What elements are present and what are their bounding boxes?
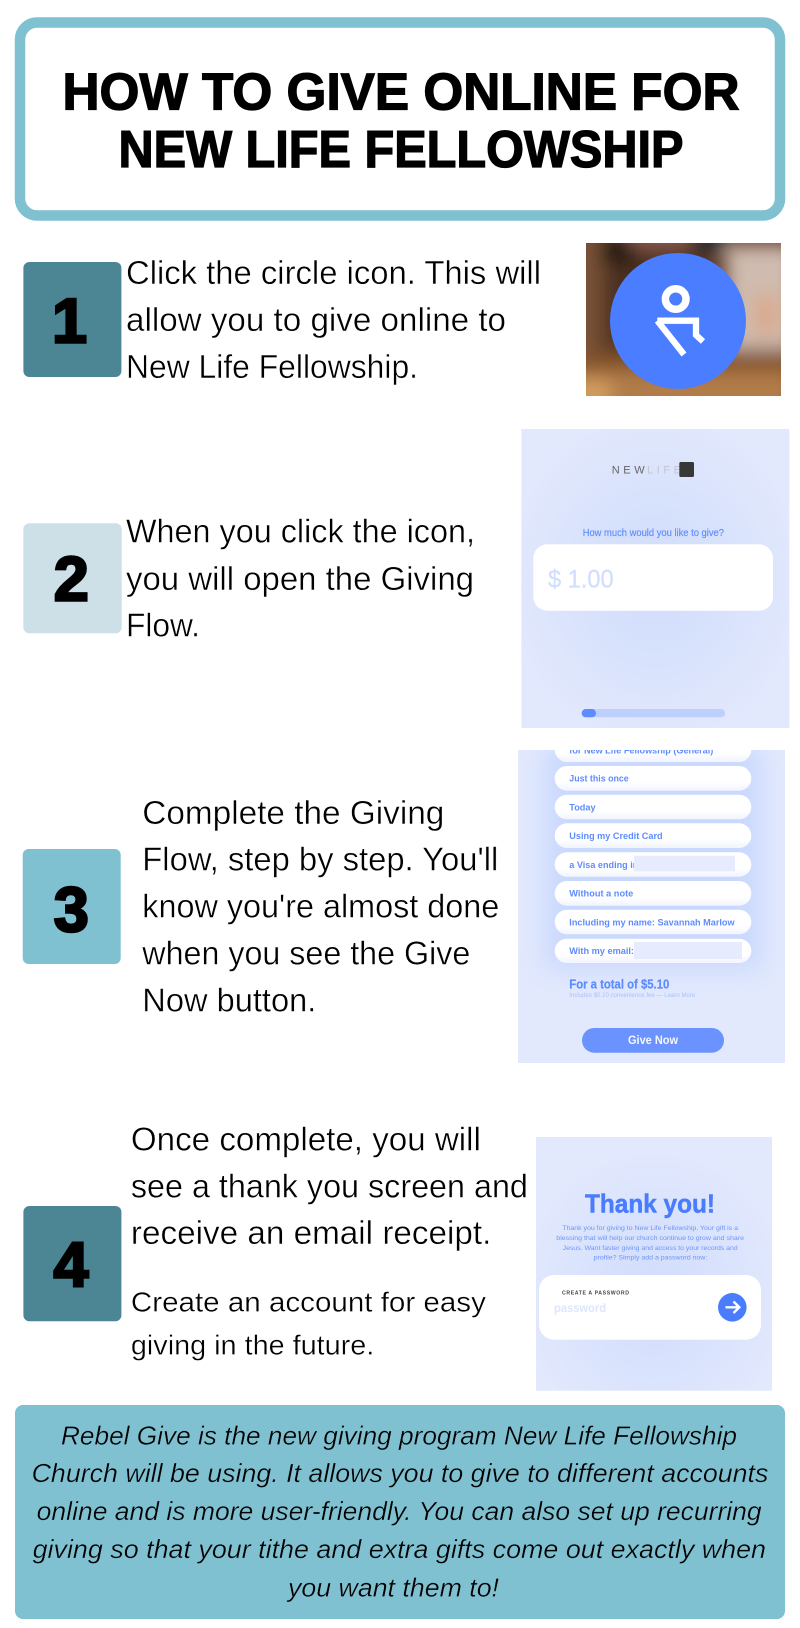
step 1 instructions: New Life Fellowship. <box>126 348 418 385</box>
option pills: Using my Credit Card <box>569 831 663 841</box>
step 4 number badge <box>23 1206 121 1321</box>
step 3 instructions <box>141 794 499 1018</box>
amount prompt: How much would you like to give? <box>583 528 724 539</box>
step 2 instructions <box>126 513 475 644</box>
footer text: you want them to! <box>286 1573 499 1603</box>
step 3 instructions: Now button. <box>142 981 316 1018</box>
new life logo: LIFE <box>647 464 681 476</box>
footer text <box>32 1420 768 1603</box>
option pills: With my email: <box>569 946 634 956</box>
thank you message: profile? Simply add a password now: <box>594 1254 707 1262</box>
password card: CREATE A PASSWORD <box>562 1291 629 1297</box>
footer text: online and is more user-friendly. You can also set up recurring <box>37 1496 762 1526</box>
thank you heading: Thank you! <box>585 1189 715 1219</box>
total amount <box>569 977 696 999</box>
step 4 image: thank you screen <box>536 1137 772 1391</box>
title text <box>62 64 740 179</box>
step 1 instructions: allow you to give online to <box>126 301 506 338</box>
footer text: giving so that your tithe and extra gifts come out exactly when <box>33 1534 766 1564</box>
amount field: $ 1.00 <box>548 566 614 594</box>
step 2 number badge <box>23 523 122 633</box>
step 4 <box>23 1121 772 1391</box>
step 3 instructions: when you see the Give <box>141 935 470 972</box>
title box <box>20 22 780 216</box>
title text: HOW TO GIVE ONLINE FOR <box>62 64 740 122</box>
step 4 instructions: giving in the future. <box>131 1329 374 1360</box>
option pills: Just this once <box>569 774 629 784</box>
step 2 instructions: Flow. <box>126 607 200 644</box>
option pills: Including my name: Savannah Marlow <box>569 917 736 927</box>
step 1 image: blue circle icon on blurred photo <box>586 243 781 396</box>
thank you message: Thank you for giving to New Life Fellowship. Your gift is a <box>562 1225 738 1232</box>
total amount: For a total of $5.10 <box>569 977 669 992</box>
step 4 instructions: see a thank you screen and <box>131 1167 528 1204</box>
step 4 instructions: Create an account for easy <box>131 1286 486 1317</box>
password card <box>539 1275 761 1340</box>
step 1 instructions <box>126 254 541 385</box>
total amount: Includes $0.10 convenience fee — Learn More <box>569 992 696 999</box>
step 4 number badge: 4 <box>53 1231 89 1301</box>
step 2 instructions: When you click the icon, <box>126 513 475 550</box>
step 3 instructions: Flow, step by step. You'll <box>142 841 498 878</box>
step 3 instructions: know you're almost done <box>142 887 499 924</box>
progress bar <box>582 709 725 717</box>
footer panel: about rebel give <box>15 1405 785 1619</box>
thank you message: blessing that will help our church continue to grow and share <box>556 1235 744 1242</box>
option pills: a Visa ending in <box>569 860 638 870</box>
step 1 number badge: 1 <box>52 286 87 356</box>
amount field <box>533 544 773 611</box>
new life logo: NEW <box>612 464 645 476</box>
give now button <box>582 1028 724 1053</box>
step 4 instructions: Once complete, you will <box>131 1121 481 1158</box>
step 3 <box>23 735 785 1063</box>
step 4 instructions <box>131 1121 528 1360</box>
footer text: Church will be using. It allows you to give to different accounts <box>32 1458 768 1488</box>
option pills: Today <box>569 802 596 812</box>
step 3 image: giving flow summary screen <box>518 735 785 1063</box>
password card: password <box>554 1301 606 1315</box>
step 3 number badge <box>23 849 121 964</box>
title text: NEW LIFE FELLOWSHIP <box>118 121 684 179</box>
step 2 instructions: you will open the Giving <box>126 560 474 597</box>
step 1 instructions: Click the circle icon. This will <box>126 254 541 291</box>
give now button: Give Now <box>628 1033 679 1047</box>
step 2 <box>23 429 789 728</box>
step 2 number badge: 2 <box>54 545 89 615</box>
new life logo <box>612 462 694 477</box>
icon: arrow button <box>718 1293 747 1322</box>
step 3 image: giving flow summary screen: for New Life Fellowship (General) <box>569 746 713 756</box>
step 3 number badge: 3 <box>54 876 89 946</box>
footer text: Rebel Give is the new giving program New Life Fellowship <box>61 1420 737 1450</box>
option pills <box>555 766 751 963</box>
option pills: Without a note <box>569 889 633 899</box>
thank you message <box>556 1225 744 1262</box>
step 4 instructions: receive an email receipt. <box>131 1214 491 1251</box>
step 3 instructions: Complete the Giving <box>142 794 444 831</box>
step 1 number badge <box>23 262 121 377</box>
thank you message: Jesus. Want faster giving and access to your records and <box>563 1245 738 1252</box>
step 2 image: giving flow amount screen <box>521 429 789 728</box>
step 1 <box>23 243 781 396</box>
